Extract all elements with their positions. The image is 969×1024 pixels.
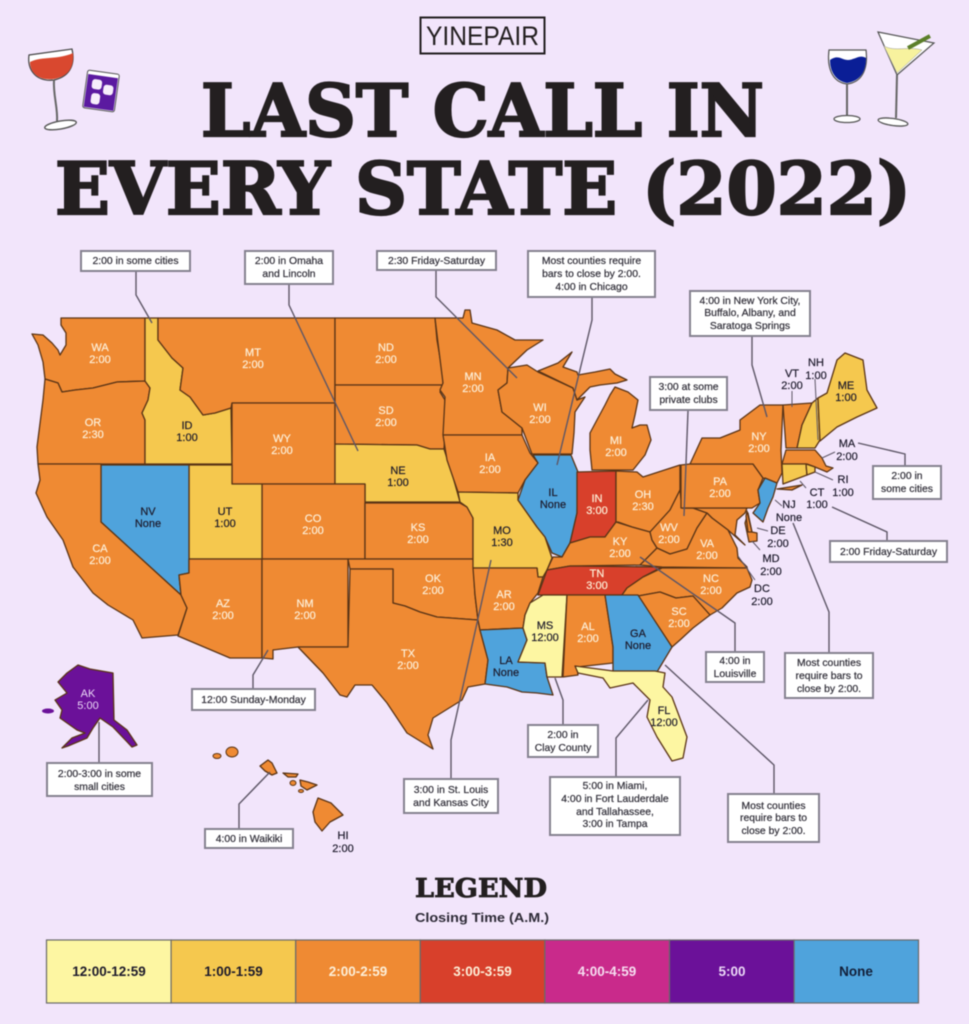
legend labels: 2:00-2:59 [329,964,387,979]
state: ND: 2:00 [375,354,397,366]
state: FL: FL [658,705,670,717]
state: WA: WA [91,342,109,354]
state: MT [158,318,335,415]
state: ME: 1:00 [835,392,857,404]
callout leaders [99,270,905,829]
state: WY: WY [273,433,292,445]
state: IA: 2:00 [479,464,501,476]
state: WV [650,490,707,554]
state: SC: SC [671,606,687,618]
legend labels: 4:00-4:59 [578,964,636,979]
callout: New Jersey: close by 2:00. [797,684,861,695]
state: VT: VT [785,368,799,380]
state: NC [622,568,752,615]
state: IA [443,435,538,493]
callout: Nebraska: and Lincoln [262,269,316,280]
callout: New York: Buffalo, Albany, and [704,308,796,319]
callout: Missouri [404,779,498,813]
state: MO: 1:30 [491,537,513,549]
callout: Pennsylvania: private clubs [659,395,718,406]
state: WV: 2:00 [658,534,680,546]
state: MS [518,595,567,677]
state: OK [348,559,478,620]
state: OH [616,465,680,532]
state: PA [681,464,763,508]
map of the United States [32,310,877,855]
state: SD [335,385,445,449]
callout: Illinois: Most counties require [542,256,641,267]
state: NE: NE [390,465,406,477]
state: KS [365,503,473,559]
legend labels: 3:00-3:59 [453,964,512,979]
state: AZ: 2:00 [212,610,234,622]
callout: New Mexico [192,689,315,710]
callout: Hawaii: 4:00 in Waikiki [216,834,282,845]
state: MS: MS [537,620,553,632]
state: AL: AL [581,621,595,633]
state: GA: None [625,640,651,652]
state: ID: 1:00 [176,432,198,444]
state: FL: 12:00 [650,717,678,729]
state: IL: None [540,499,566,511]
state: CA [36,464,187,638]
state: MD [682,508,757,545]
state: TX: 2:00 [397,660,419,672]
legend labels: 1:00-1:59 [204,964,263,979]
state: PA: PA [713,476,728,488]
state: NE [335,444,460,502]
state: MN: 2:00 [462,383,484,395]
state: CO: CO [305,513,322,525]
callout: Idaho: 2:00 in some cities [92,256,179,267]
state: CT: 1:00 [806,499,828,511]
state: CT: CT [810,487,825,499]
state: PA: 2:00 [709,488,731,500]
legend heading: LEGEND [415,874,547,904]
state: IL [518,455,578,557]
state: LA: LA [499,655,513,667]
state: AL [563,595,613,677]
state: OH: OH [635,489,651,501]
state: NC: NC [703,573,719,585]
state: NH: NH [808,357,824,369]
legend labels: 5:00 [718,964,746,979]
callout: Connecticut [830,541,947,562]
state: VA: 2:00 [696,550,718,562]
state: AK: 5:00 [77,700,99,712]
callout: Georgia: require bars to [740,813,807,824]
legend labels: None [839,964,873,979]
callout: Mississippi [528,725,598,757]
state: KS: KS [411,522,425,534]
state: WY [232,403,335,484]
state: AZ: AZ [216,598,230,610]
state: MT: MT [245,347,261,359]
state: RI [806,464,854,499]
state: OK: OK [425,573,442,585]
state: MA: 2:00 [836,451,858,463]
icon: purple cocktail glass with ice [83,70,119,112]
callout: Pennsylvania [650,377,727,410]
state: NH [797,357,827,448]
callout: Illinois [528,251,655,297]
callout: Illinois: bars to close by 2:00. [542,269,641,280]
state: NM: 2:00 [294,610,316,622]
state: WI [498,365,585,454]
callout: New Jersey: Most counties [797,658,861,669]
state: DE: DE [770,525,786,537]
state: UT: 1:00 [214,518,236,530]
callout: Florida: 4:00 in Fort Lauderdale [561,794,669,805]
state: NY: 2:00 [748,443,770,455]
state: NY: NY [751,431,767,443]
state: NJ: NJ [782,499,796,511]
state: WA [32,318,145,392]
state: KY: KY [613,536,628,548]
callout: Kentucky: 4:00 in [719,656,751,667]
legend labels: 12:00-12:59 [72,964,146,979]
state: VT: 2:00 [781,380,803,392]
state: AK: AK [81,688,96,700]
state: ND: ND [378,342,394,354]
legend colour scale [46,940,918,1003]
callout: Kentucky [706,652,764,682]
state: WV: WV [660,522,679,534]
state: WI: 2:00 [529,414,551,426]
title [55,68,911,231]
state: MI: 2:00 [605,447,627,459]
state: WA: 2:00 [89,354,111,366]
state: FL [575,666,687,761]
callout: Illinois: 4:00 in Chicago [555,282,628,293]
callout: Alaska: 2:00-3:00 in some [58,769,141,780]
title: EVERY STATE (2022) [55,146,911,231]
state: MO: MO [493,525,511,537]
state: TX: TX [401,648,416,660]
callout: Nebraska: 2:00 in Omaha [255,256,323,267]
state: OH: 2:30 [632,501,654,513]
legend heading [415,874,549,925]
callout: Kentucky: Louisville [714,669,757,680]
state: HI: 2:00 [332,843,354,855]
callout: New Jersey: require bars to [796,671,863,682]
callout: Georgia [728,794,819,842]
state: AR [473,568,543,630]
state: MI: MI [610,435,622,447]
callout: Missouri: 3:00 in St. Louis [414,785,488,796]
state: IA: IA [485,452,496,464]
callout: Massachusetts [873,466,941,499]
state: AL: 2:00 [577,633,599,645]
state: NJ: None [776,512,802,524]
callout: Alaska: small cities [74,782,125,793]
callout: Mississippi: 2:00 in [547,730,579,741]
state: MN [435,310,543,435]
state: ND [335,318,443,385]
state: ME: ME [838,380,854,392]
state: NV: None [135,518,161,530]
state: SD: SD [378,405,394,417]
state: ID [142,318,232,464]
state: CO [262,484,365,559]
state: RI: RI [838,474,848,486]
state: VA [640,513,747,568]
icon: red wine glass [29,49,77,132]
callout: Massachusetts: some cities [881,484,933,495]
state: TN [538,566,662,595]
state: GA: GA [630,628,647,640]
label: DC: 2:00 [751,596,773,608]
state: KS: 2:00 [407,534,429,546]
state: MS: 12:00 [531,632,559,644]
callout: New York: Saratoga Springs [710,321,790,332]
state: WY: 2:00 [271,445,293,457]
state: NC: 2:00 [700,585,722,597]
state: NJ [753,478,802,524]
state: CA: CA [92,543,108,555]
callout: Florida: 5:00 in Miami, [583,781,647,792]
state: DE: 2:00 [767,538,789,550]
label: DC [751,583,773,608]
callout: New York: 4:00 in New York City, [700,296,800,307]
label: MD [760,553,782,578]
state: TN: TN [590,568,604,580]
state: NY [690,405,802,490]
state: LA: None [493,667,519,679]
state: MT: 2:00 [242,359,264,371]
callout: Missouri: and Kansas City [413,798,490,809]
callout: Connecticut: 2:00 Friday-Saturday [840,547,938,558]
logo: VinePair: YINEPAIR [426,21,539,51]
legend heading: Closing Time (A.M.) [415,910,549,925]
state: HI [213,747,354,855]
state: IN: IN [592,493,603,505]
state: IN [570,471,616,543]
callout: New Mexico: 12:00 Sunday-Monday [201,695,307,706]
state: GA [605,595,672,672]
state: SC [638,592,710,647]
state: OR: OR [85,417,101,429]
state: TX [298,569,488,749]
state: MA: MA [839,438,856,450]
callout: Nebraska [245,251,333,284]
callout: Georgia: close by 2:00. [741,826,806,837]
callout: Mississippi: Clay County [535,743,592,754]
callout: New York [690,291,810,336]
state: WI: WI [533,402,547,414]
state: NM: NM [296,598,314,610]
state: VA: VA [700,538,715,550]
state: IL: IL [548,487,558,499]
state: AZ [178,559,262,658]
callout: Alaska [47,763,152,796]
state: UT [189,465,262,559]
state: IN: 3:00 [586,505,608,517]
state: SC: 2:00 [668,618,690,630]
state: MI [538,352,651,470]
state: SD: 2:00 [375,417,397,429]
state: CO: 2:00 [302,525,324,537]
state: UT: UT [218,506,233,518]
title: LAST CALL IN [201,68,764,153]
state: MN: MN [464,371,482,383]
callout: Georgia: Most counties [741,801,806,812]
state: DE [746,511,789,550]
state: ME [818,353,877,441]
state: TN: 3:00 [586,580,608,592]
label: DC: DC [754,583,770,595]
state: VT [781,368,812,448]
state: NV: NV [140,506,156,518]
callout: New Jersey [785,653,873,698]
callout: Pennsylvania: 3:00 at some [658,382,719,393]
state: MA [782,438,858,472]
callout: Florida: 3:00 in Tampa [582,819,648,830]
state: OK: 2:00 [422,585,444,597]
state: ID: ID [182,420,193,432]
state: OR: 2:30 [82,429,104,441]
callout: Minnesota [377,251,496,270]
state: AK [42,665,137,748]
state: NM [262,559,348,659]
state: LA [480,628,553,695]
callout: Massachusetts: 2:00 in [891,471,923,482]
label: MD: MD [762,553,780,565]
state: HI: HI [338,830,348,842]
legend labels [72,964,873,979]
callout: Idaho [81,251,190,271]
label: MD: 2:00 [760,566,782,578]
state: NE: 1:00 [387,477,409,489]
callout: Hawaii [205,829,293,848]
state: AR: AR [496,589,512,601]
state: AR: 2:00 [493,601,515,613]
icon: martini glass with olives [878,32,934,128]
state: NV [101,465,189,595]
callout: Florida: and Tallahassee, [576,807,654,818]
state: CA: 2:00 [89,555,111,567]
state: MO [458,492,552,577]
state: OR [37,379,150,464]
callout: Florida [550,777,680,835]
icon: blue wine glass [829,50,866,122]
state: RI: 1:00 [832,487,854,499]
state: KY: 2:00 [609,548,631,560]
state: KY [547,522,657,570]
state: CT [782,464,828,511]
callout: Minnesota: 2:30 Friday-Saturday [388,256,486,267]
state: NH: 1:00 [805,370,827,382]
